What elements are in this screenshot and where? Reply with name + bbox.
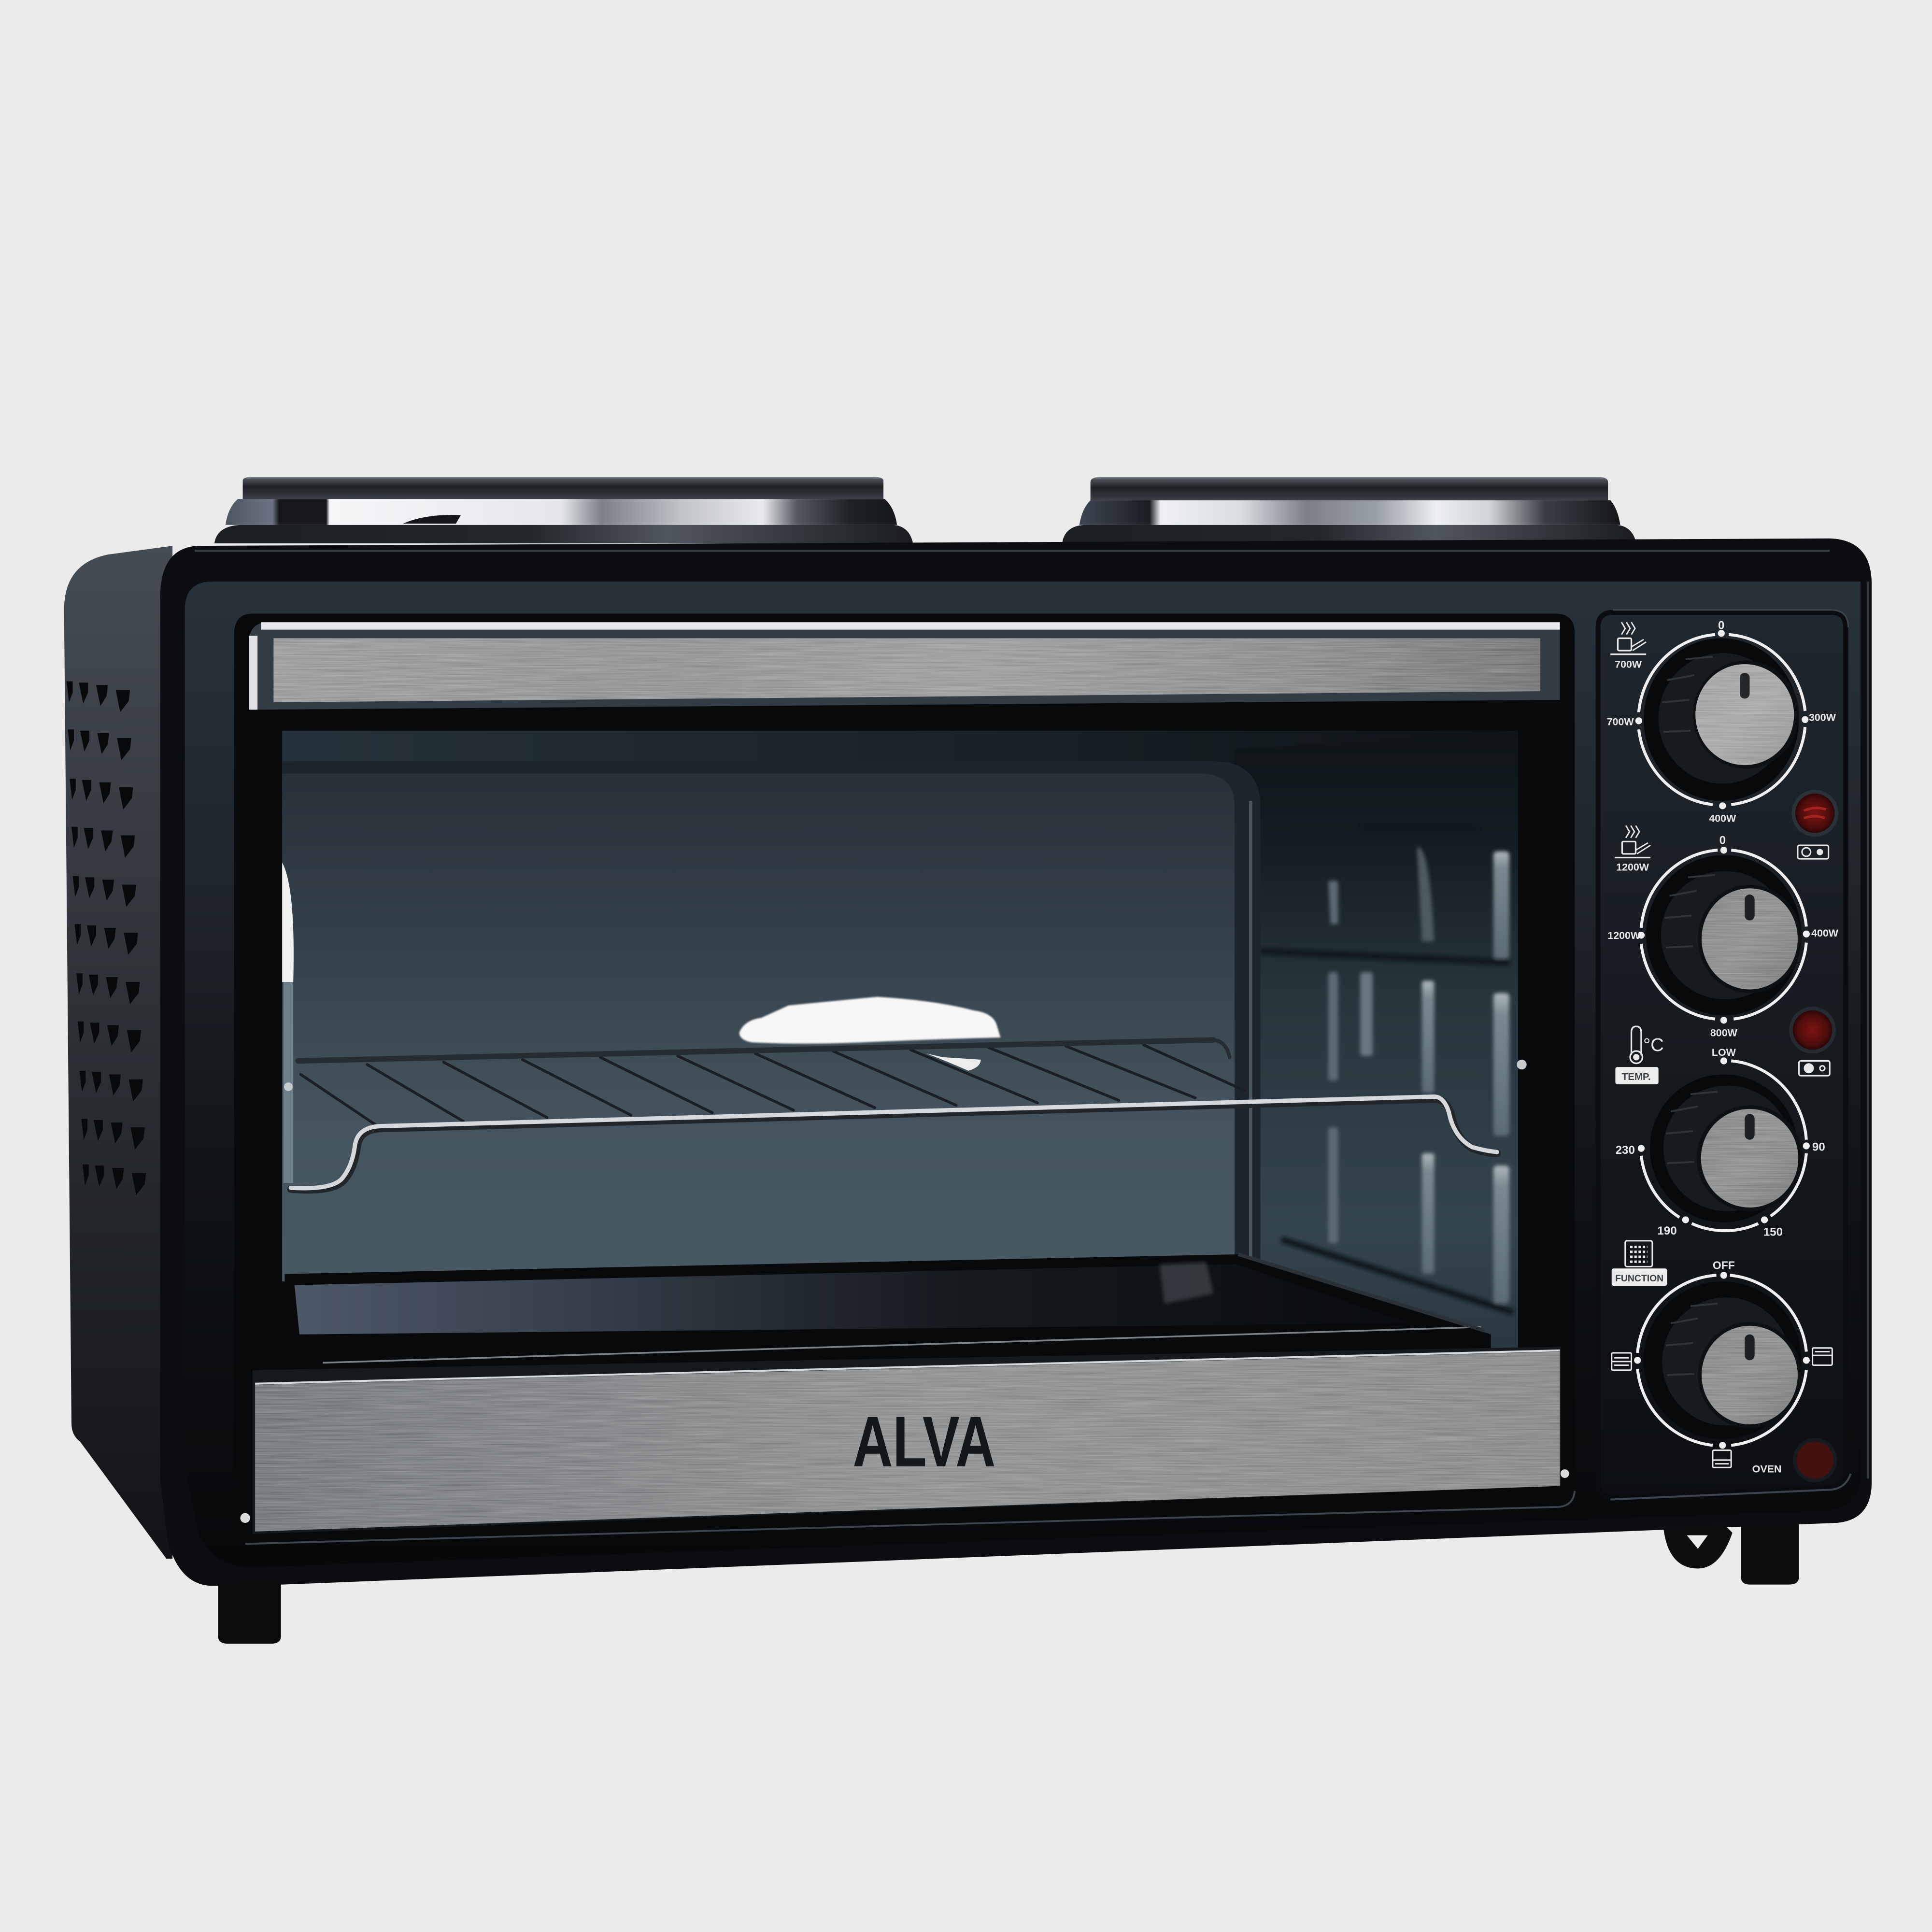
- right wall: [1235, 731, 1518, 1351]
- dial labels: 300W: [1809, 711, 1836, 723]
- dial labels: OFF: [1713, 1259, 1735, 1272]
- dial labels: 190: [1657, 1224, 1677, 1237]
- back wall: [282, 762, 1261, 1281]
- dial labels: 0: [1718, 619, 1725, 632]
- door frame surround: [185, 582, 1861, 1567]
- dial labels: 0: [1719, 834, 1726, 847]
- foot: right: [1741, 1523, 1799, 1585]
- dial labels: 400W: [1709, 813, 1736, 824]
- cavity top band: [282, 731, 1518, 774]
- indicator lamps: [1789, 790, 1838, 1482]
- dial labels: [1607, 619, 1839, 1475]
- dial labels: 800W: [1710, 1027, 1738, 1038]
- dial labels: LOW: [1712, 1047, 1736, 1058]
- rear power cord: [1663, 1525, 1733, 1568]
- hotplate: right: [1062, 477, 1636, 543]
- baking tray: [284, 1254, 1491, 1386]
- icon: thermometer and temp badge: TEMP.: [1622, 1072, 1651, 1082]
- hotplate: left: [214, 477, 913, 543]
- icon: pan 1200W: 1200W: [1616, 861, 1649, 873]
- dial labels: 1200W: [1607, 930, 1641, 941]
- top door handle panel: [249, 622, 1560, 710]
- side vents: [67, 682, 146, 1195]
- dial labels: 230: [1616, 1144, 1635, 1157]
- dial labels: 90: [1812, 1141, 1825, 1154]
- dial: temperature: [1638, 1057, 1810, 1231]
- dial labels: OVEN: [1752, 1463, 1781, 1475]
- dial: function: [1634, 1272, 1810, 1449]
- icon: pan 1200W: [1615, 825, 1650, 873]
- wire rack: [291, 1040, 1497, 1190]
- dial labels: 150: [1763, 1226, 1783, 1239]
- bright reflection: [739, 997, 1000, 1044]
- logo: ALVA: ALVA: [852, 1402, 995, 1482]
- icon: thermometer and temp badge: °C: [1643, 1035, 1664, 1055]
- dial: hotplate 1: [1635, 630, 1808, 810]
- oven side with vents: [64, 546, 172, 1559]
- right edge highlight: [1867, 582, 1868, 1478]
- control panel: [1598, 610, 1851, 1500]
- embossed wall highlights: [1261, 829, 1513, 1312]
- icons: function modes: [1612, 1348, 1832, 1467]
- oven cavity: [234, 613, 1575, 1544]
- foot: left: [218, 1579, 281, 1644]
- dial labels: 700W: [1607, 716, 1634, 727]
- bottom door panel with logo: [240, 1347, 1569, 1534]
- icon: thermometer and temp badge: [1615, 1026, 1664, 1084]
- icon: pan 700W: [1610, 622, 1646, 670]
- dial: hotplate 2: [1638, 847, 1810, 1023]
- brushed steel strip: [273, 638, 1540, 702]
- oven front body: [160, 539, 1872, 1586]
- dial labels: 400W: [1811, 927, 1839, 939]
- icon: function and badge: FUNCTION: [1615, 1273, 1663, 1284]
- icon: function and badge: [1612, 1241, 1667, 1286]
- icon: hotplate switches: [1798, 845, 1830, 1076]
- icon: pan 700W: 700W: [1615, 659, 1642, 670]
